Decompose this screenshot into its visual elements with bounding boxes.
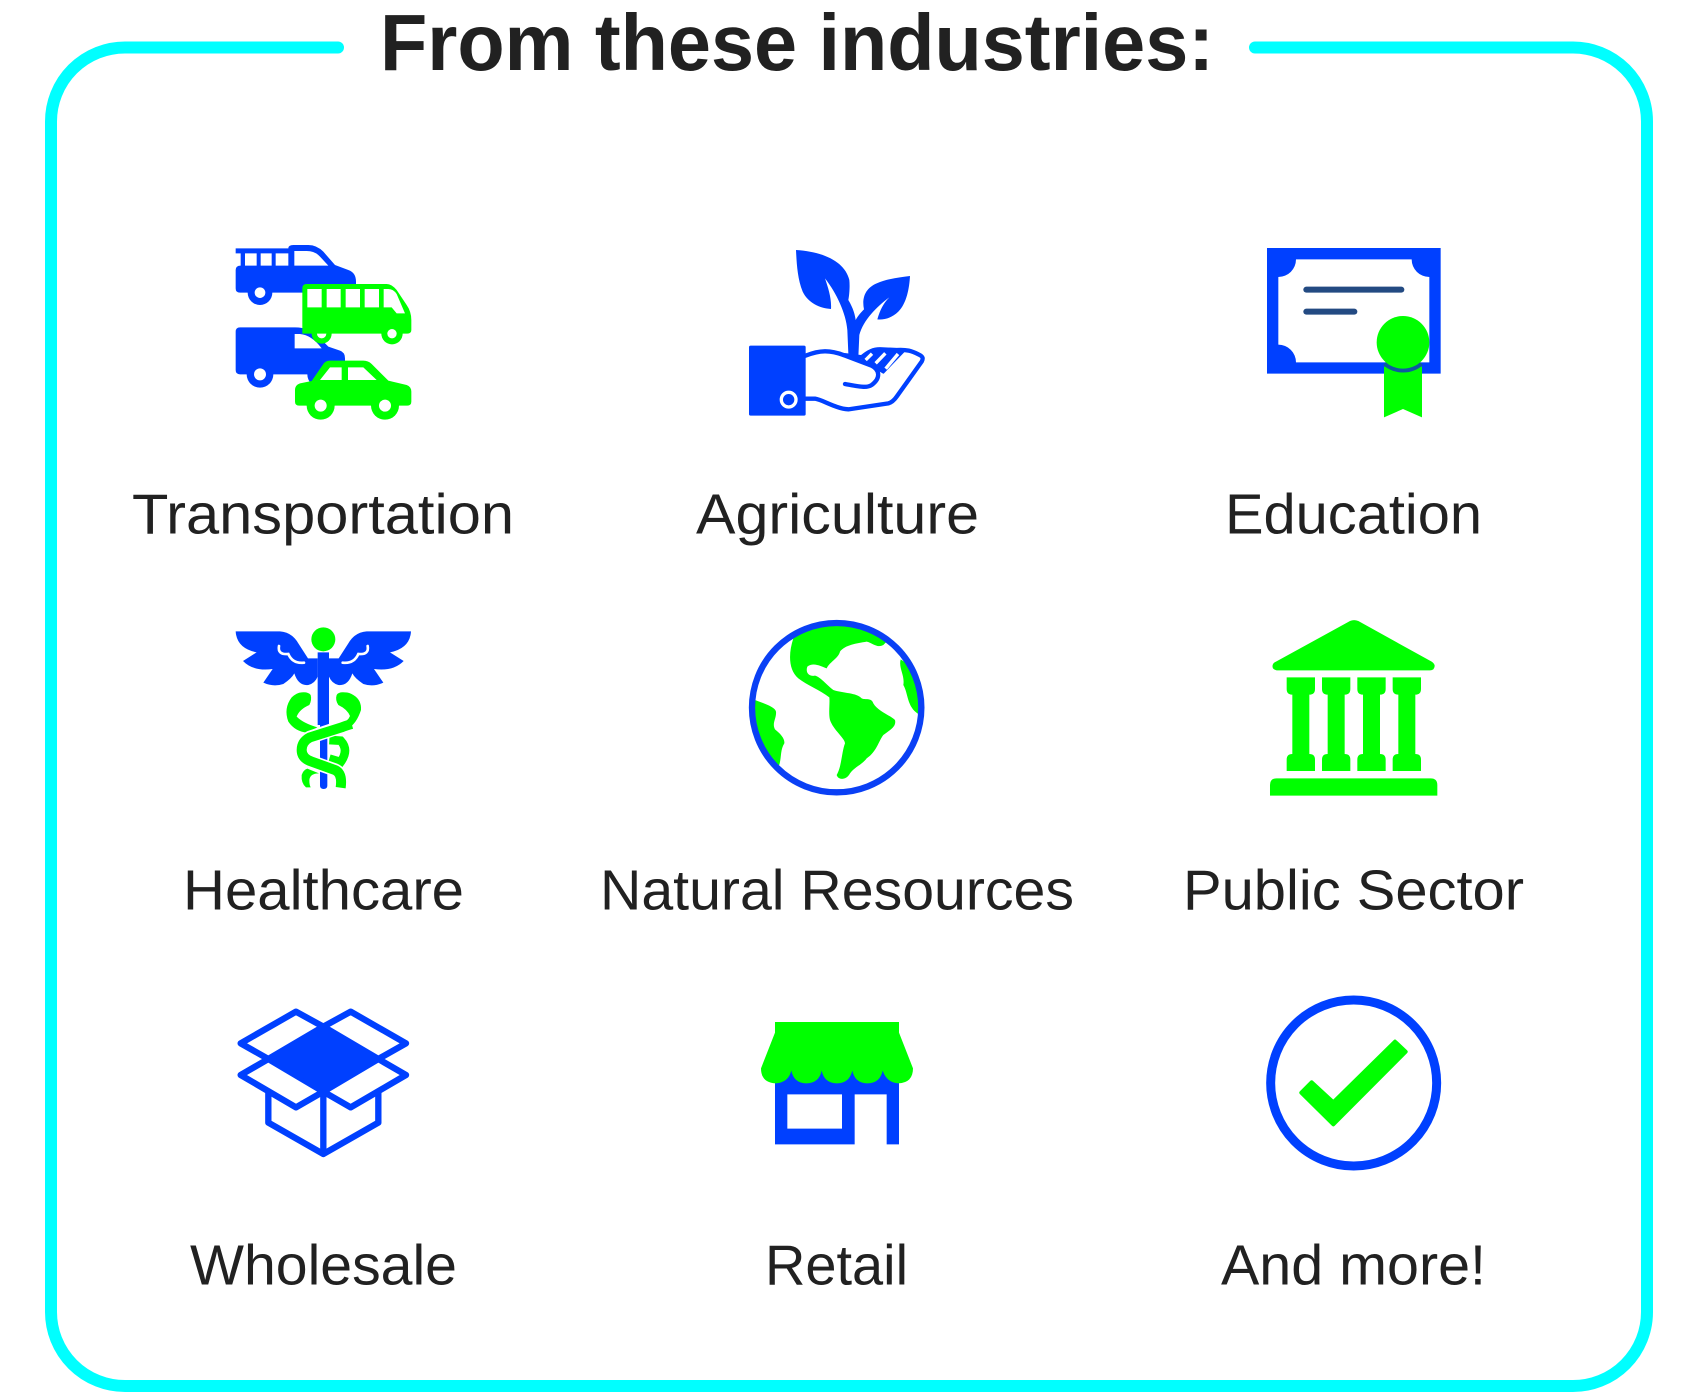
icon: government building bbox=[1270, 620, 1437, 796]
box body bbox=[268, 1092, 378, 1154]
label: Transportation bbox=[132, 482, 514, 546]
snakes bbox=[286, 692, 361, 788]
ring bbox=[1271, 1000, 1437, 1166]
cuff bbox=[749, 346, 806, 416]
seal bbox=[1377, 316, 1429, 369]
label: Healthcare bbox=[183, 858, 464, 922]
item: Education bbox=[1225, 248, 1482, 546]
building bbox=[775, 1067, 899, 1144]
left wing bbox=[236, 631, 318, 685]
item: Public Sector bbox=[1183, 620, 1524, 922]
hand bbox=[806, 349, 923, 409]
item: Agriculture bbox=[696, 250, 979, 546]
icon: globe bbox=[747, 621, 927, 793]
certificate sheet bbox=[1267, 248, 1441, 374]
label: Retail bbox=[765, 1234, 908, 1298]
car bbox=[295, 361, 411, 420]
right wing bbox=[329, 631, 411, 685]
plant bbox=[796, 250, 910, 357]
icon: vehicles bbox=[236, 245, 411, 420]
feather details bbox=[279, 646, 368, 663]
ribbon bbox=[1384, 367, 1422, 417]
icon: open box bbox=[241, 1012, 406, 1154]
head bbox=[311, 627, 335, 651]
awning bbox=[761, 1022, 913, 1083]
icon: caduceus bbox=[236, 627, 411, 789]
base bbox=[1270, 778, 1437, 796]
item: Wholesale bbox=[190, 1012, 457, 1298]
title: From these industries: bbox=[380, 0, 1214, 87]
fire truck bbox=[236, 245, 356, 305]
item: Natural Resources bbox=[600, 621, 1074, 922]
item: Retail bbox=[761, 1022, 913, 1298]
text lines bbox=[1303, 287, 1404, 315]
bus bbox=[302, 284, 411, 344]
flaps bbox=[241, 1012, 406, 1107]
label: Natural Resources bbox=[600, 858, 1074, 922]
globe background bbox=[752, 623, 922, 793]
roof bbox=[1272, 620, 1435, 670]
item: Healthcare bbox=[183, 627, 464, 922]
globe outline bbox=[752, 623, 921, 792]
label: Public Sector bbox=[1183, 858, 1524, 922]
label: And more! bbox=[1221, 1234, 1486, 1298]
continents bbox=[755, 626, 918, 779]
item: Transportation bbox=[132, 245, 514, 546]
label: Agriculture bbox=[696, 482, 979, 546]
label: Wholesale bbox=[190, 1234, 457, 1298]
label: Education bbox=[1225, 482, 1482, 546]
cuff button bbox=[781, 392, 796, 407]
icon: certificate bbox=[1267, 248, 1441, 417]
icon: hand holding plant bbox=[749, 250, 923, 416]
box interior bbox=[268, 1027, 378, 1092]
icon: storefront bbox=[761, 1022, 913, 1144]
check mark bbox=[1301, 1042, 1406, 1124]
staff bbox=[318, 652, 329, 789]
seal shadow bbox=[1385, 363, 1421, 370]
columns bbox=[1287, 677, 1421, 771]
van bbox=[236, 327, 345, 388]
icon: check mark in circle bbox=[1271, 1000, 1437, 1166]
item: And more! bbox=[1221, 1000, 1486, 1298]
